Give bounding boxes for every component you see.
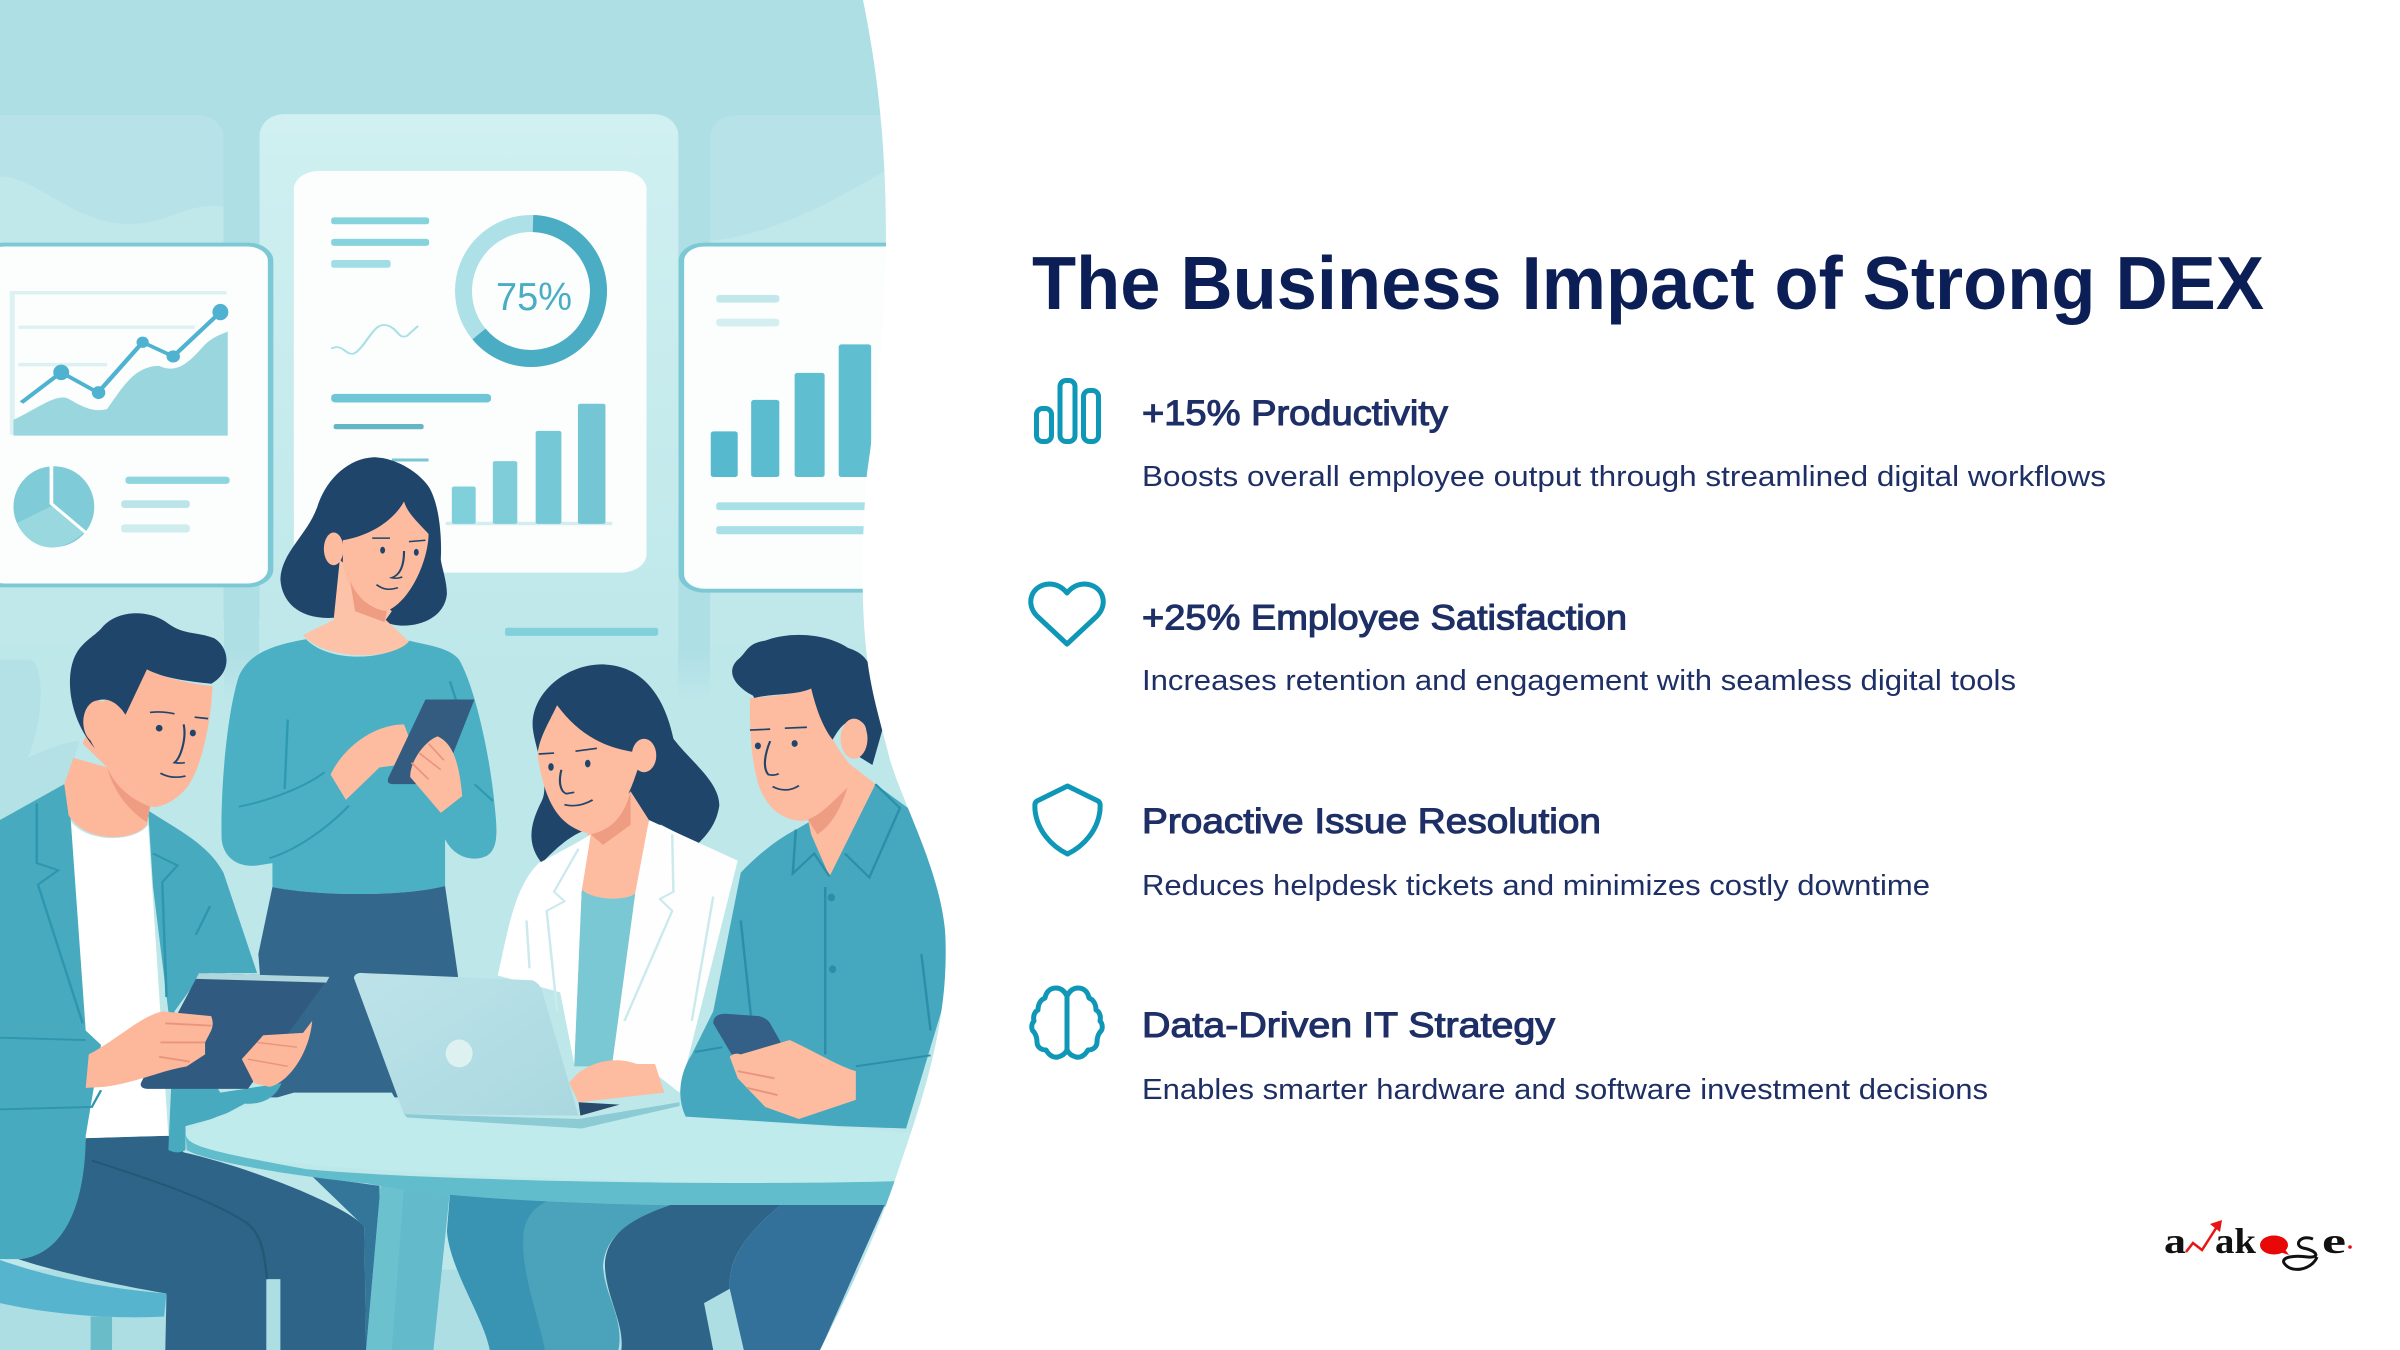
logo: a [2164,1221,2186,1261]
description: Boosts overall employee output through streamlined digital workflows [1142,461,2106,493]
area and line chart [13,304,228,436]
bar chart [446,404,612,525]
tablet [141,973,329,1089]
table [185,1093,912,1350]
item: productivity [1036,380,2106,493]
seating area below table [0,1260,875,1350]
man with tablet [0,613,366,1350]
heading: Proactive Issue Resolution [1142,802,1601,841]
item: data-driven strategy [1032,988,1988,1106]
heading: +25% Employee Satisfaction [1142,598,1627,638]
title: The Business Impact of Strong DEX [1032,241,2264,325]
heading: +15% Productivity [1142,394,1449,433]
logo: e [2322,1221,2346,1261]
standing woman [221,457,496,1097]
man with phone [605,635,946,1350]
stool [0,1260,167,1317]
item: proactive issue resolution [1035,786,1930,902]
icon: bar chart [1036,380,1098,442]
left dashboard screen [0,245,271,585]
description: Increases retention and engagement with seamless digital tools [1142,665,2016,697]
seated woman with laptop [498,664,738,1102]
center dashboard screen [294,171,646,573]
curved white edge of illustration [820,0,2400,1350]
donut gauge 75% [464,224,599,358]
logo [2164,1220,2352,1269]
icon: heart [1031,584,1103,644]
laptop [354,973,680,1129]
icon: brain [1032,988,1102,1057]
logo: ak [2215,1221,2256,1261]
phone [713,1014,790,1058]
item: employee satisfaction [1031,584,2016,697]
donut gauge 75%: 75% [496,276,572,319]
pie chart [13,466,94,548]
description: Reduces helpdesk tickets and minimizes costly downtime [1142,870,1930,902]
heading: Data-Driven IT Strategy [1142,1006,1556,1045]
description: Enables smarter hardware and software investment decisions [1142,1074,1988,1106]
right dashboard screen [681,245,926,591]
icon: shield [1035,786,1100,854]
people seated at the table [0,613,946,1350]
office background [0,0,960,1350]
